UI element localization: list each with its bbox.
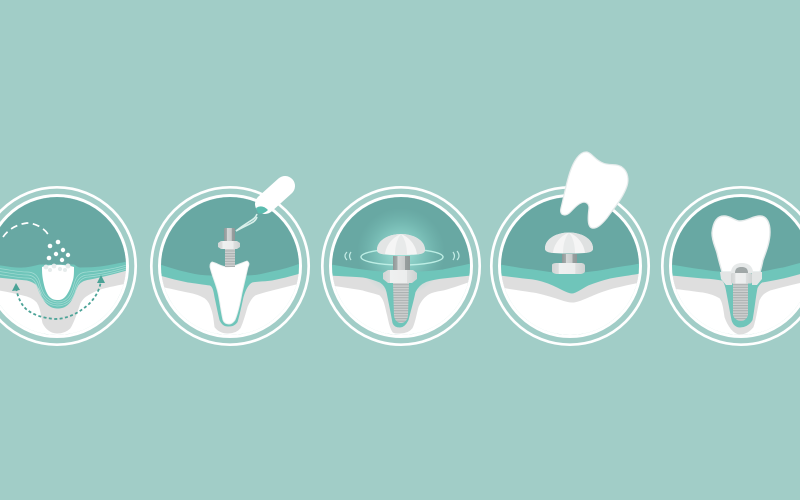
dashed teal arrows	[12, 275, 105, 319]
gum layer	[160, 264, 300, 326]
ring behind	[361, 249, 443, 265]
white tooth socket	[210, 261, 249, 324]
panel: step 5 finished implant	[662, 187, 800, 345]
bone layer	[331, 256, 471, 333]
post	[393, 256, 410, 270]
gum layer	[671, 261, 800, 327]
dashed white arc	[3, 223, 49, 237]
dark upper field	[500, 196, 640, 273]
graft particles in cavity	[44, 264, 70, 272]
socket cavity with graft	[42, 265, 74, 300]
implant threads	[393, 283, 409, 323]
collar	[731, 273, 752, 284]
bone layer	[500, 256, 640, 302]
post	[224, 228, 235, 241]
vibration marks	[345, 251, 459, 260]
dark upper field	[160, 196, 300, 276]
post	[562, 254, 577, 263]
panel: step 2 drilling and abutment screw	[151, 187, 309, 345]
hex nut	[218, 241, 240, 249]
dark upper field	[0, 196, 127, 268]
wire to post	[236, 217, 257, 231]
gum layer	[331, 264, 471, 327]
panel: step 3 implant with healing glow	[322, 187, 480, 345]
bone layer	[0, 256, 127, 333]
dark upper field	[671, 196, 800, 272]
collar	[383, 270, 417, 283]
icon: floating tooth crown	[561, 152, 628, 228]
screw threaded shaft	[225, 248, 235, 267]
dome cap	[545, 232, 593, 254]
panel: step 4 crown placement	[491, 187, 649, 345]
bone layer	[160, 256, 300, 333]
arch around abutment	[731, 263, 753, 273]
implant threads	[733, 283, 748, 321]
crown	[712, 216, 770, 272]
glow	[366, 216, 436, 290]
collar	[552, 263, 585, 274]
bone layer	[672, 274, 800, 334]
gum band	[0, 262, 127, 308]
crown base flanges	[720, 272, 762, 285]
dark upper field	[331, 196, 471, 272]
dome healing cap	[377, 234, 425, 255]
gum layer	[500, 264, 640, 293]
panel: step 1 bone graft	[0, 187, 136, 345]
falling graft dots	[47, 240, 70, 262]
icon: dental drill handle	[236, 186, 285, 231]
infographic: dental implant steps	[0, 151, 800, 346]
abutment head	[735, 267, 748, 273]
